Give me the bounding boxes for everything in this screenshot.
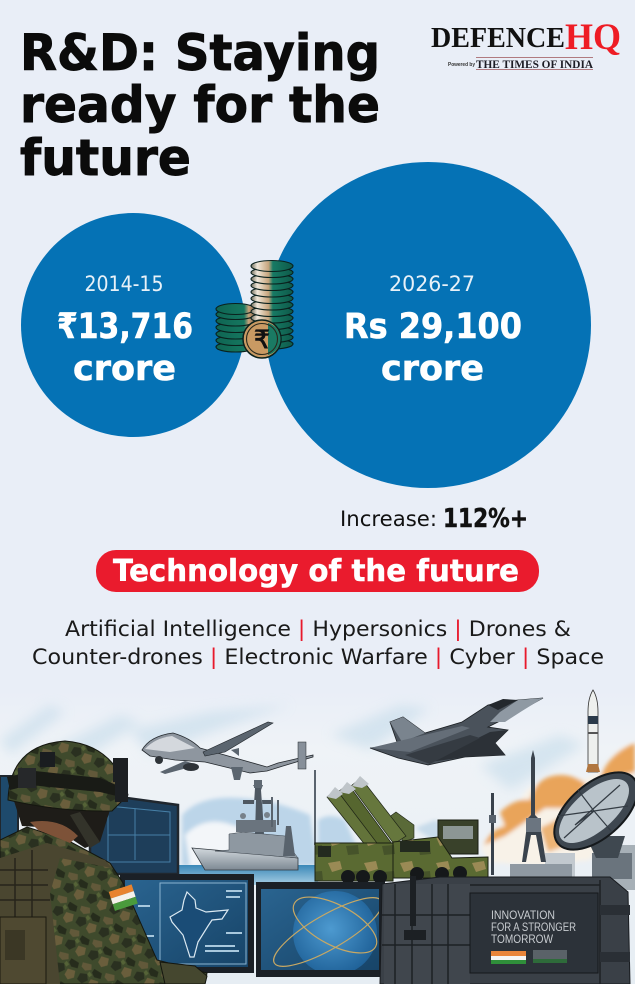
icon: launch tower <box>489 750 575 880</box>
panel: 2026-27 budget circle: crore <box>381 349 484 389</box>
panel: 2026-27 budget circle <box>265 162 591 488</box>
title: ready for the <box>20 76 380 134</box>
logo: Defence HQ <box>431 17 621 71</box>
panel: 2014-15 budget circle: ₹13,716 <box>57 307 193 347</box>
monitor: radar back <box>0 776 178 874</box>
title: future <box>20 129 191 187</box>
soldier <box>0 741 207 984</box>
case slogan: FOR A STRONGER <box>491 922 576 934</box>
title: R&D: Staying <box>20 24 380 82</box>
icon: warship <box>192 770 316 870</box>
distant clouds and hills <box>182 798 455 866</box>
illustration: defence technology scene <box>0 690 635 984</box>
icon: satellite dish <box>541 758 635 890</box>
panel: 2026-27 budget circle: 2026-27 <box>389 272 475 296</box>
increase stat: Increase: <box>340 507 437 531</box>
monitor: globe orbit <box>256 882 390 978</box>
sea <box>178 865 318 885</box>
title <box>20 24 380 187</box>
equipment case <box>380 876 630 984</box>
rocket launch smoke <box>482 743 635 866</box>
icon: rocket <box>586 690 600 772</box>
panel: 2014-15 budget circle: 2014-15 <box>84 272 164 296</box>
icon: coin stacks: ₹ <box>254 326 270 354</box>
case flags <box>491 950 567 964</box>
flag patch <box>109 884 138 911</box>
panel: 2014-15 budget circle <box>21 213 245 437</box>
panel: 2014-15 budget circle: crore <box>73 349 176 389</box>
heading pill: Technology of the future: Technology of the future <box>113 554 519 589</box>
monitor: India map <box>120 874 254 973</box>
icon: fighter jet <box>370 698 543 765</box>
icon: missile launcher trucks <box>315 776 488 884</box>
technology list: Artificial Intelligence | Hypersonics | Drones & <box>65 617 571 642</box>
logo: Defence HQ: Powered by <box>448 62 476 68</box>
increase stat: 112%+ <box>443 504 528 534</box>
icon: military drone <box>142 722 313 780</box>
case slogan: TOMORROW <box>491 934 553 946</box>
panel: 2026-27 budget circle: Rs 29,100 <box>344 307 522 347</box>
increase stat <box>340 504 528 534</box>
case slogan: INNOVATION <box>491 910 555 922</box>
logo: Defence HQ: HQ <box>565 17 621 58</box>
case slogan <box>491 910 576 946</box>
logo: Defence HQ: DEFENCE <box>431 23 565 54</box>
icon: coin stacks <box>216 260 293 358</box>
technology list: Counter-drones | Electronic Warfare | Cyber | Space <box>32 645 604 670</box>
logo: Defence HQ: THE TIMES OF INDIA <box>476 57 593 71</box>
technology list <box>32 617 604 670</box>
